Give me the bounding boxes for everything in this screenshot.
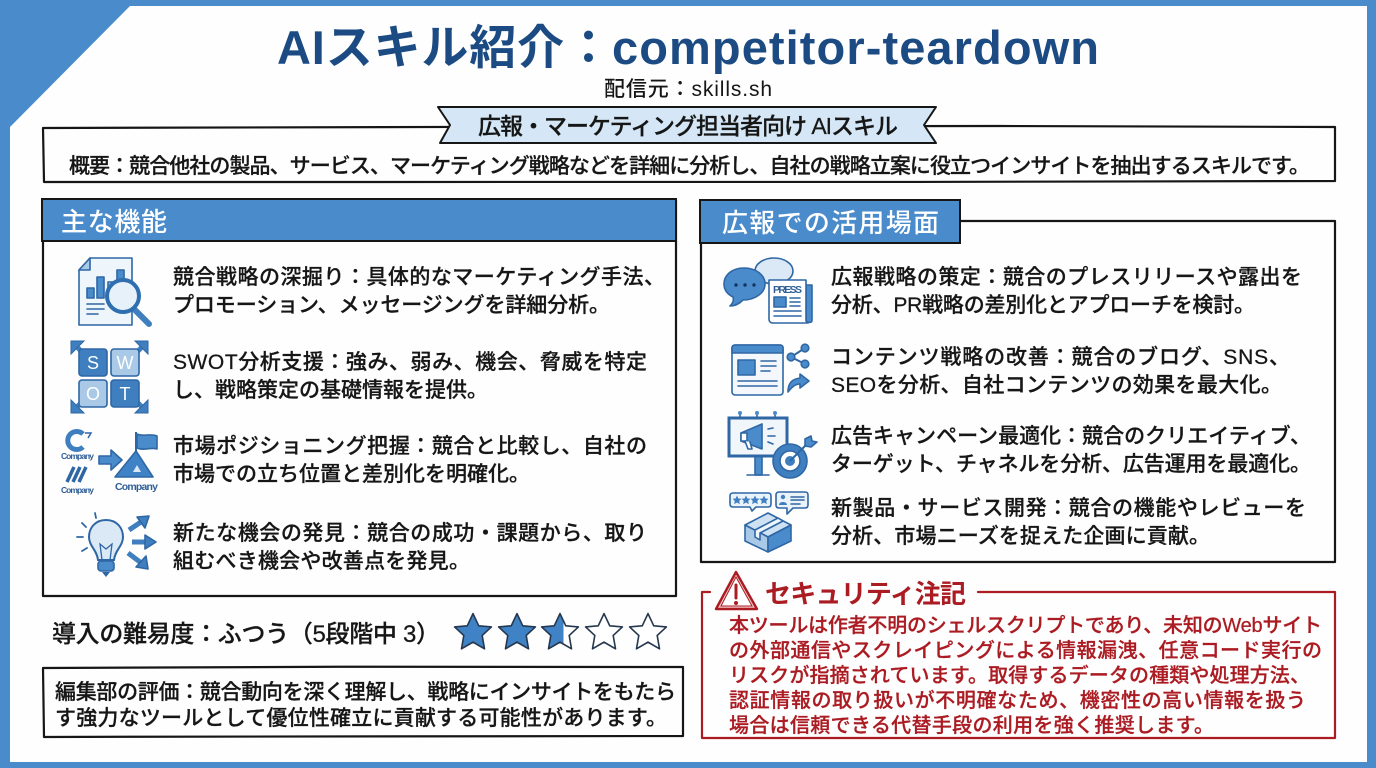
text: SWOT support — [173, 351, 647, 402]
icon: warning triangle — [716, 572, 757, 609]
text: PR strategy: 広報戦略の策定：競合のプレスリリースや露出を — [831, 266, 1302, 289]
icon: light bulb with arrows — [77, 513, 156, 577]
overview box — [43, 126, 1335, 182]
icon: market positioning: Company — [115, 481, 158, 493]
audience ribbon: 広報・マーケティング担当者向け AIスキル — [478, 113, 898, 139]
icon: document with magnifier — [79, 258, 149, 325]
icon: market positioning — [61, 431, 158, 495]
heading: main features — [42, 199, 676, 241]
text: product development: 分析、市場ニーズを捉えた企画に貢献。 — [831, 525, 1210, 548]
text: new opportunities: 組むべき機会や改善点を発見。 — [173, 550, 470, 573]
text: SWOT support: し、戦略策定の基礎情報を提供。 — [173, 379, 488, 402]
icon: review bubbles and box — [730, 492, 808, 552]
title — [277, 21, 1099, 74]
text: market positioning — [173, 435, 647, 486]
difficulty rating: 導入の難易度：ふつう（5段階中 3） — [52, 621, 440, 648]
text: competitive strategy — [173, 266, 665, 317]
text: product development: 新製品・サービス開発：競合の機能やレビューを — [831, 497, 1306, 520]
text: security notice body: 場合は信頼できる代替手段の利用を強く推奨します。 — [729, 714, 1214, 737]
text: competitive strategy: プロモーション、メッセージングを詳細分析。 — [173, 294, 610, 317]
icon: market positioning: Company — [61, 485, 94, 495]
icon: SWOT grid: W — [116, 353, 134, 373]
icon: web content and share — [732, 344, 809, 395]
difficulty rating — [52, 614, 666, 649]
text: new opportunities: 新たな機会の発見：競合の成功・課題から、取り — [173, 522, 647, 545]
heading: security notice: セキュリティ注記 — [765, 579, 966, 609]
icon: billboard and target — [729, 411, 817, 478]
text: PR strategy: 分析、PR戦略の差別化とアプローチを検討。 — [831, 294, 1255, 317]
title: competitor-teardown — [612, 21, 1099, 74]
text: security notice body: リスクが指摘されています。取得するデータの種類や処理方法、 — [729, 663, 1310, 687]
panel: main features — [42, 199, 676, 596]
heading: main features: 主な機能 — [61, 207, 167, 237]
text: security notice body: の外部通信やスクレイピングによる情報漏洩、任意コード実行の — [729, 639, 1322, 662]
text: new opportunities — [173, 522, 647, 573]
icon: SWOT grid: O — [86, 384, 100, 404]
editorial review box: す強力なツールとして優位性確立に貢献する可能性があります。 — [55, 707, 667, 730]
icon: market positioning: Company — [61, 451, 94, 461]
icon: speech bubbles and press — [724, 258, 812, 323]
text: competitive strategy: 競合戦略の深掘り：具体的なマーケティング手法、 — [173, 266, 665, 289]
audience ribbon — [438, 107, 936, 143]
text: product development — [831, 497, 1306, 548]
text: ad campaign: 広告キャンペーン最適化：競合のクリエイティブ、 — [831, 424, 1311, 448]
text: ad campaign: ターゲット、チャネルを分析、広告運用を最適化。 — [831, 453, 1311, 476]
text: ad campaign — [831, 424, 1311, 476]
text: content strategy: コンテンツ戦略の改善：競合のブログ、SNS、 — [831, 345, 1290, 369]
text: content strategy: SEOを分析、自社コンテンツの効果を最大化。 — [831, 374, 1282, 397]
overview box: 概要：競合他社の製品、サービス、マーケティング戦略などを詳細に分析し、自社の戦略立案に役立つインサイトを抽出するスキルです。 — [69, 155, 1310, 178]
heading: PR use cases: 広報での活用場面 — [722, 208, 939, 238]
icon: SWOT grid — [71, 341, 148, 413]
text: content strategy — [831, 345, 1290, 397]
editorial review box: 編集部の評価：競合動向を深く理解し、戦略にインサイトをもたら — [55, 681, 676, 704]
panel: PR use cases — [700, 200, 1335, 562]
icon: speech bubbles and press: PRESS — [773, 284, 802, 296]
panel: security notice — [702, 572, 1335, 738]
text: security notice body — [729, 614, 1322, 737]
icon: SWOT grid: T — [120, 384, 130, 404]
title: AIスキル紹介： — [277, 21, 612, 74]
heading: PR use cases — [700, 200, 960, 243]
text: SWOT support: SWOT分析支援：強み、弱み、機会、脅威を特定 — [173, 351, 647, 374]
text: security notice body: 本ツールは作者不明のシェルスクリプトであり、未知のWebサイト — [729, 614, 1322, 637]
star rating — [455, 614, 666, 649]
text: security notice body: 認証情報の取り扱いが不明確なため、機密性の高い情報を扱う — [729, 689, 1306, 712]
text: market positioning: 市場での立ち位置と差別化を明確化。 — [173, 463, 530, 486]
source line: 配信元：skills.sh — [604, 78, 772, 101]
text: PR strategy — [831, 266, 1302, 317]
editorial review box — [43, 667, 683, 737]
text: market positioning: 市場ポジショニング把握：競合と比較し、自社の — [173, 435, 647, 458]
icon: SWOT grid: S — [87, 353, 99, 373]
